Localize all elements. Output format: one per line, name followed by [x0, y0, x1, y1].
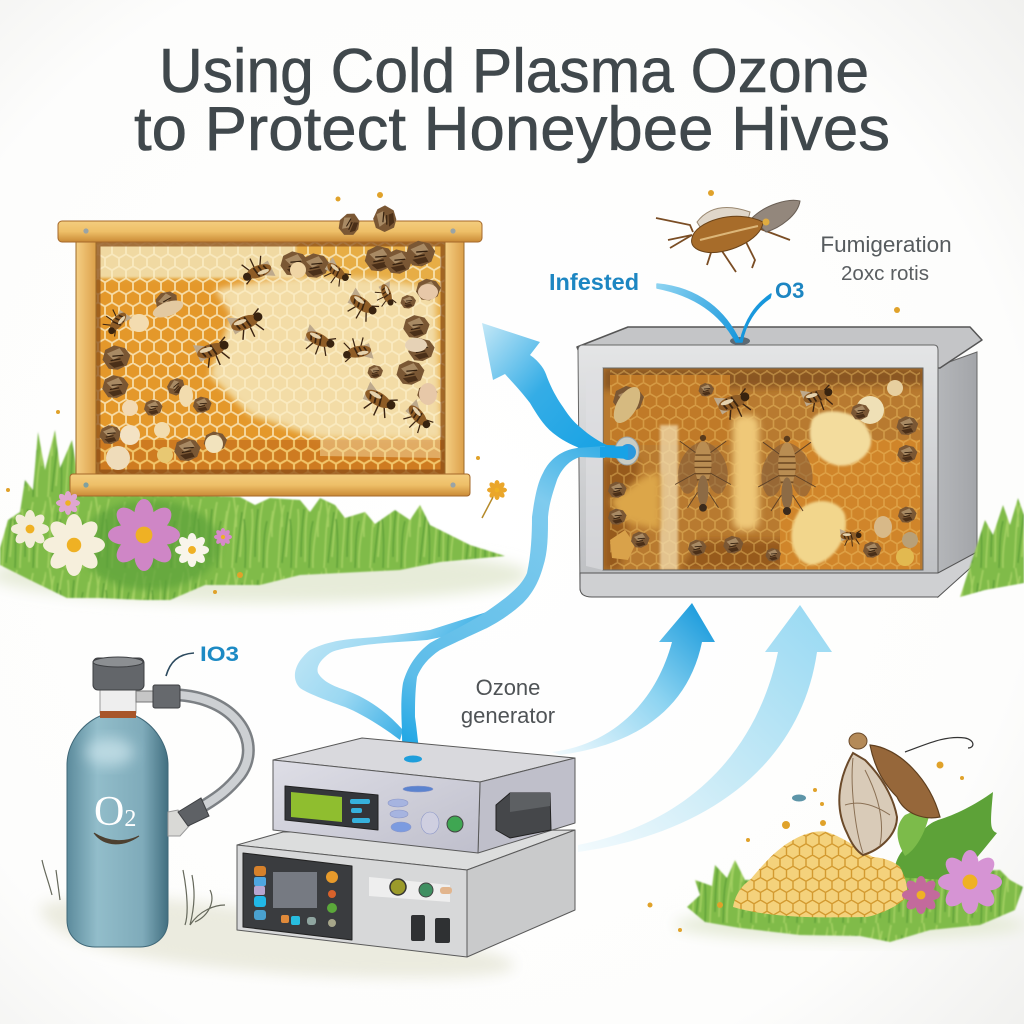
label: fumigeration: 2oxc rotis — [841, 263, 929, 285]
label: ozone generator: Ozone — [476, 675, 540, 700]
arrow: box to frame — [482, 323, 627, 458]
comb pile — [733, 831, 907, 917]
valve pipe — [136, 691, 156, 702]
arrow: upper generator to box — [552, 603, 715, 755]
O2 label: O — [94, 789, 124, 835]
meadow under honeycomb frame — [0, 430, 530, 603]
scattered pollen — [6, 190, 964, 932]
hive box — [577, 327, 982, 597]
frame comb — [90, 238, 450, 478]
front buttons — [388, 786, 439, 834]
moth — [870, 745, 940, 818]
lower generator — [237, 830, 575, 957]
O2 cylinder — [42, 657, 248, 947]
grass right of box — [960, 498, 1024, 597]
wildflowers — [11, 480, 507, 576]
box interior comb — [600, 365, 926, 573]
tank smile mark — [94, 833, 139, 844]
ground shadow — [40, 897, 514, 978]
bees on frame — [99, 204, 441, 470]
port on box lid — [730, 337, 750, 345]
hive parasites — [608, 380, 918, 566]
label: infested: Infested — [549, 269, 639, 295]
O2 label: 2 — [124, 806, 136, 832]
tank body — [67, 716, 168, 947]
label: ozone generator — [461, 675, 555, 728]
label: IO3 with leader: IO3 — [200, 643, 239, 666]
upper generator — [273, 738, 575, 853]
control panel — [243, 853, 352, 940]
flying pest — [656, 200, 800, 272]
display — [285, 786, 378, 830]
label: IO3 with leader — [166, 643, 239, 676]
title — [134, 37, 890, 164]
title: Using Cold Plasma Ozone — [159, 37, 869, 106]
intake streams into lid — [657, 284, 771, 342]
label: fumigeration: Fumigeration — [820, 232, 952, 257]
box lid — [577, 327, 982, 368]
flowers — [938, 850, 1002, 914]
port on box — [600, 437, 639, 465]
label: fumigeration — [820, 232, 952, 285]
honeycomb frame with bees — [58, 204, 482, 496]
box frame — [578, 345, 938, 590]
label: O3: O3 — [775, 278, 804, 303]
title: to Protect Honeybee Hives — [134, 95, 890, 164]
grass tufts — [42, 860, 225, 925]
label: ozone generator: generator — [461, 703, 555, 728]
lower connector — [168, 810, 190, 836]
neck and cap — [100, 689, 136, 713]
box side panel — [938, 352, 977, 597]
power block — [496, 793, 551, 838]
indicator strip — [369, 877, 450, 902]
arrow: generator to box — [295, 437, 639, 766]
arrow: lower generator to box — [578, 605, 832, 852]
leaves — [893, 792, 997, 880]
honeycomb pile and moth — [675, 733, 1024, 942]
frame wood — [58, 221, 482, 496]
hose — [180, 695, 248, 805]
sockets — [411, 915, 425, 941]
